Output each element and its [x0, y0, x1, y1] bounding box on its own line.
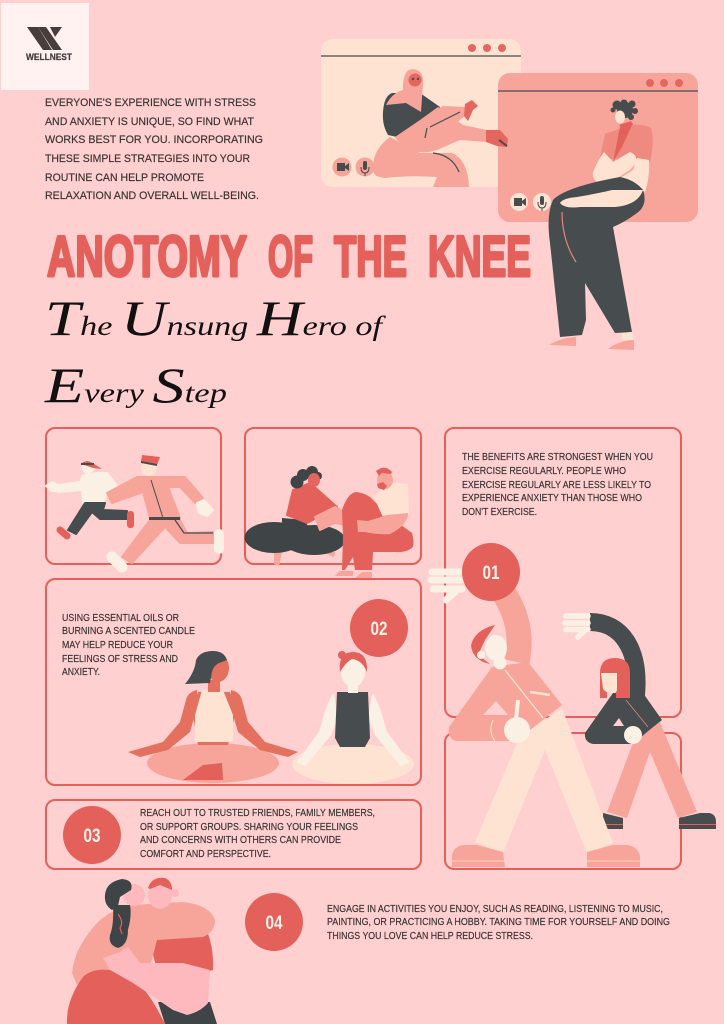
embracing couple: [67, 878, 217, 1024]
logo: [1, 3, 89, 90]
text block: THE BENEFITS ARE STRONGEST WHEN YOU: [462, 452, 653, 463]
small exercising figure: [565, 616, 716, 829]
intro text: ROUTINE CAN HELP PROMOTE: [45, 172, 204, 184]
large runner: [107, 455, 224, 567]
intro text: [45, 97, 263, 202]
small runner: [46, 460, 134, 536]
subtitle: E very S tep: [44, 357, 227, 413]
panel: support: [46, 800, 421, 869]
hobbies text: PAINTING, OR PRACTICING A HOBBY. TAKING TIME FOR YOURSELF AND DOING: [327, 917, 670, 928]
woman: [244, 466, 358, 566]
icon: microphone: [356, 158, 374, 176]
panel: essential oils: [46, 579, 421, 785]
number 03: [63, 806, 121, 864]
large exercising figure: [431, 543, 640, 867]
text block: AND CONCERNS WITH OTHERS CAN PROVIDE: [140, 835, 341, 846]
number 02: [350, 599, 408, 657]
intro text: RELAXATION AND OVERALL WELL-BEING.: [45, 190, 259, 202]
text block: EXERCISE REGULARLY. PEOPLE WHO: [462, 466, 626, 477]
icon: microphone: [533, 193, 551, 211]
title: OF: [268, 225, 313, 289]
icon: camera: [332, 158, 352, 176]
text block: FEELINGS OF STRESS AND: [62, 654, 178, 665]
man: [335, 468, 414, 578]
video window: woman: [321, 39, 521, 187]
icon: camera: [510, 193, 528, 211]
title: THE: [334, 225, 407, 289]
title: [47, 225, 531, 289]
woman's hand: [486, 130, 508, 147]
text block: ANXIETY.: [62, 667, 100, 678]
hobbies text: ENGAGE IN ACTIVITIES YOU ENJOY, SUCH AS READING, LISTENING TO MUSIC,: [327, 904, 663, 915]
panel: couple sitting: [244, 428, 421, 578]
title: ANOTOMY: [47, 225, 247, 289]
number 04: 04: [266, 913, 283, 934]
text block: EXERCISE REGULARLY ARE LESS LIKELY TO: [462, 480, 651, 491]
text block: EXPERIENCE ANXIETY THAN THOSE WHO: [462, 493, 642, 504]
man sitting: [549, 100, 653, 350]
number 04: [245, 893, 303, 951]
text block: COMFORT AND PERSPECTIVE.: [140, 849, 271, 860]
text block: [462, 452, 653, 518]
meditating woman left: [128, 651, 298, 783]
title: KNEE: [428, 225, 531, 289]
hobbies text: [327, 904, 670, 942]
text block: DON'T EXERCISE.: [462, 507, 537, 518]
hobbies text: THINGS YOU LOVE CAN HELP REDUCE STRESS.: [327, 931, 533, 942]
text block: OR SUPPORT GROUPS. SHARING YOUR FEELINGS: [140, 822, 358, 833]
intro text: EVERYONE'S EXPERIENCE WITH STRESS: [45, 97, 256, 109]
panel: exercise top: [445, 428, 681, 717]
subtitle: T he U nsung H ero of: [45, 290, 386, 346]
logo: WELLNEST: [26, 52, 72, 62]
panel: exercise bottom: [445, 733, 681, 869]
text block: [62, 613, 195, 678]
text block: MAY HELP REDUCE YOUR: [62, 640, 173, 651]
number 02: 02: [370, 619, 388, 640]
intro text: AND ANXIETY IS UNIQUE, SO FIND WHAT: [45, 116, 254, 128]
text block: USING ESSENTIAL OILS OR: [62, 613, 179, 624]
text block: BURNING A SCENTED CANDLE: [62, 626, 195, 637]
woman in hijab: [373, 69, 487, 187]
video window: man: [498, 73, 698, 222]
number 01: 01: [482, 563, 500, 584]
text block: [140, 808, 375, 860]
panel: runners: [46, 428, 224, 567]
subtitle: [44, 290, 386, 413]
meditating woman right: [292, 651, 414, 784]
number 03: 03: [84, 826, 100, 847]
intro text: WORKS BEST FOR YOU. INCORPORATING: [45, 134, 263, 146]
intro text: THESE SIMPLE STRATEGIES INTO YOUR: [45, 153, 250, 165]
text block: REACH OUT TO TRUSTED FRIENDS, FAMILY MEMBERS,: [140, 808, 375, 819]
number 01: [462, 543, 520, 601]
